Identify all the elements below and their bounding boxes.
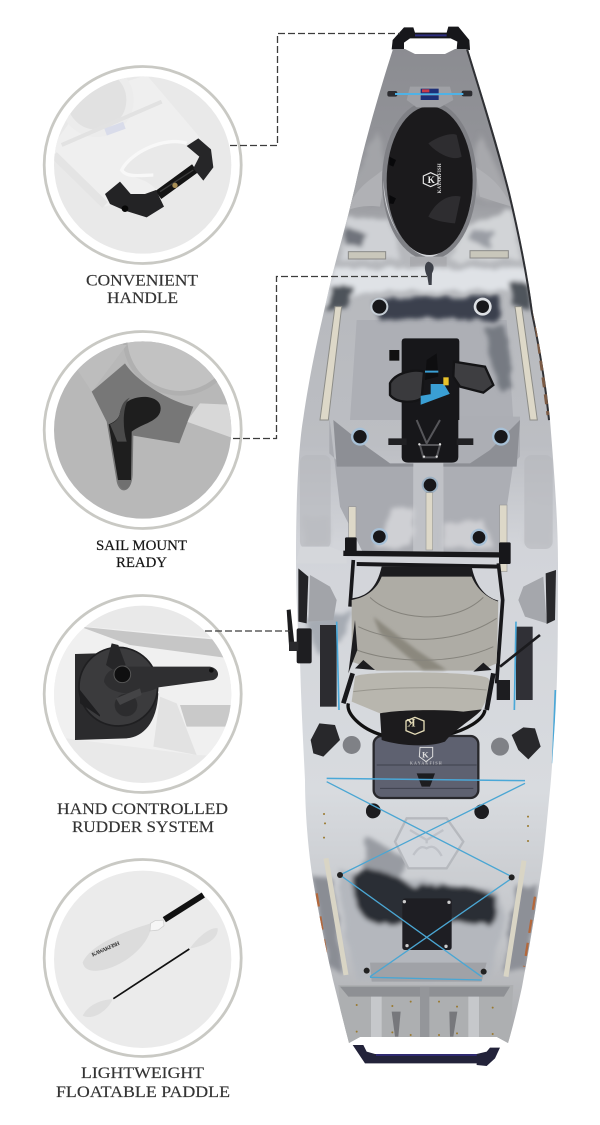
label: rudder system xyxy=(57,801,228,836)
seat back cushion xyxy=(352,577,498,671)
handle photo xyxy=(50,67,231,254)
rudder photo xyxy=(50,606,237,783)
foot pedals xyxy=(389,338,493,420)
stern deck xyxy=(312,782,540,1052)
seat frame xyxy=(343,553,510,555)
ring xyxy=(44,596,241,792)
panel: sail mount xyxy=(42,330,243,530)
ring xyxy=(44,66,241,264)
seat logo panel xyxy=(380,709,482,745)
label: rudder system: RUDDER SYSTEM xyxy=(72,819,214,836)
paddle photo: KAWAKFISH xyxy=(91,941,121,958)
label: sail mount: READY xyxy=(116,555,167,571)
orange side flecks xyxy=(534,310,548,415)
ring xyxy=(44,860,241,1056)
label: floatable paddle xyxy=(56,1065,230,1101)
hull xyxy=(296,49,558,1043)
label: sail mount xyxy=(96,538,187,571)
panel: rudder system xyxy=(44,596,241,792)
sail mount photo xyxy=(54,341,232,519)
leader line: handle xyxy=(230,34,400,146)
mid deck: K xyxy=(422,749,429,759)
stern handle xyxy=(353,1045,500,1066)
right hull edge xyxy=(468,49,550,420)
mid deck: KAYAKFISH xyxy=(410,760,442,765)
pedal plate base xyxy=(388,420,473,463)
rudder lever on hull side xyxy=(287,609,312,663)
cockpit front xyxy=(350,320,513,420)
paddle photo xyxy=(54,871,231,1048)
hull edge cutouts xyxy=(405,49,455,54)
label: floatable paddle: LIGHTWEIGHT xyxy=(81,1065,205,1082)
bow deck: KAYAKFISH xyxy=(438,163,443,193)
label: convenient handle: CONVENIENT xyxy=(86,272,199,290)
label: convenient handle xyxy=(86,272,199,307)
panel: convenient handle xyxy=(44,66,241,264)
leader line: rudder xyxy=(205,630,290,632)
seat base cushion xyxy=(352,672,490,713)
kayak xyxy=(280,27,570,1066)
panel: floatable paddle xyxy=(44,860,241,1056)
label: floatable paddle: FLOATABLE PADDLE xyxy=(56,1084,230,1101)
bow deck xyxy=(320,87,540,420)
bow handle xyxy=(392,27,470,50)
mid deck xyxy=(296,417,556,819)
seat: K xyxy=(406,716,415,728)
seat xyxy=(343,537,540,745)
bow deck: K xyxy=(428,176,436,186)
leader line: sail mount xyxy=(233,276,427,438)
label: convenient handle: HANDLE xyxy=(107,290,178,307)
label: rudder system: HAND CONTROLLED xyxy=(57,801,228,818)
label: sail mount: SAIL MOUNT xyxy=(96,538,187,554)
ring xyxy=(44,332,241,528)
